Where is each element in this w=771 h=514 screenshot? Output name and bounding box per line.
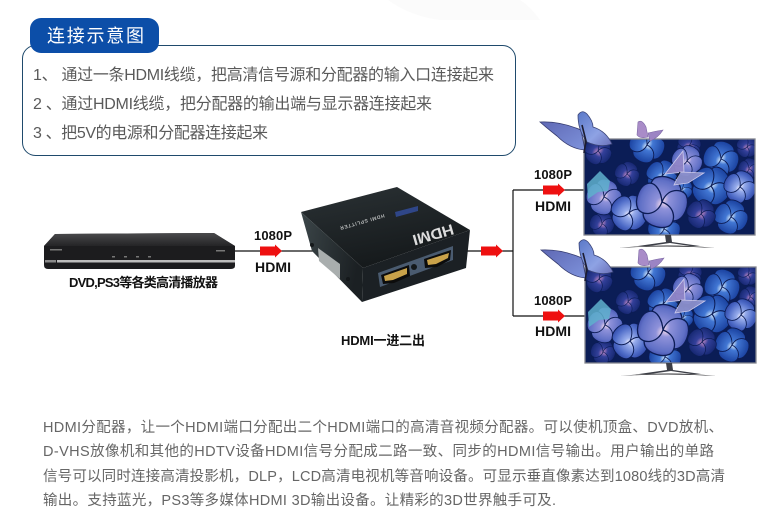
description paragraph: 信号可以同时连接高清投影机，DLP，LCD高清电视机等音响设备。可显示垂直像素达到1080线的3D高清 <box>43 467 725 485</box>
step 3: 3 、把5V的电源和分配器连接起来 <box>33 124 268 142</box>
arrow: to bottom TV <box>543 310 565 322</box>
description paragraph <box>43 419 725 509</box>
panel: top TV display <box>540 112 762 248</box>
step 1: 1、 通过一条HDMI线缆，把高清信号源和分配器的输入口连接起来 <box>33 66 494 84</box>
label: 1080P input: 1080P <box>254 228 292 243</box>
arrow: splitter output <box>481 244 503 258</box>
label: 1080P bottom: 1080P <box>534 293 572 308</box>
description paragraph: 输出。支持蓝光，PS3等多媒体HDMI 3D输出设备。让精彩的3D世界触手可及. <box>43 491 556 509</box>
label: HDMI input: HDMI <box>255 259 291 275</box>
panel: connection instructions <box>22 18 516 156</box>
connection wires <box>235 190 585 316</box>
label: HDMI 1-in-2-out: HDMI一进二出 <box>341 333 425 348</box>
heading tab <box>30 18 159 53</box>
heading tab: 连接示意图 <box>47 26 144 46</box>
logo: upside-down HDMI: HDMI <box>411 220 456 248</box>
arrow: input <box>260 244 282 258</box>
step 2: 2 、通过HDMI线缆，把分配器的输出端与显示器连接起来 <box>33 95 432 113</box>
description paragraph: D-VHS放像机和其他的HDTV设备HDMI信号分配成二路一致、同步的HDMI信号输出。用户输出的单路 <box>43 443 714 460</box>
panel: bottom TV display <box>541 240 763 376</box>
label: 1080P top: 1080P <box>534 167 572 182</box>
icon: HDMI splitter <box>301 187 470 302</box>
arrow: to top TV <box>543 184 565 196</box>
description paragraph: HDMI分配器，让一个HDMI端口分配出二个HDMI端口的高清音视频分配器。可以使机顶盒、DVD放机、 <box>43 419 723 436</box>
label: HDMI top: HDMI <box>535 198 571 214</box>
icon: DVD player <box>44 233 235 269</box>
label: DVD player: DVD,PS3等各类高清播放器 <box>69 275 218 290</box>
label: HDMI bottom: HDMI <box>535 323 571 339</box>
logo: upside-down splitter text: HDMI SPLITTER <box>339 212 385 231</box>
